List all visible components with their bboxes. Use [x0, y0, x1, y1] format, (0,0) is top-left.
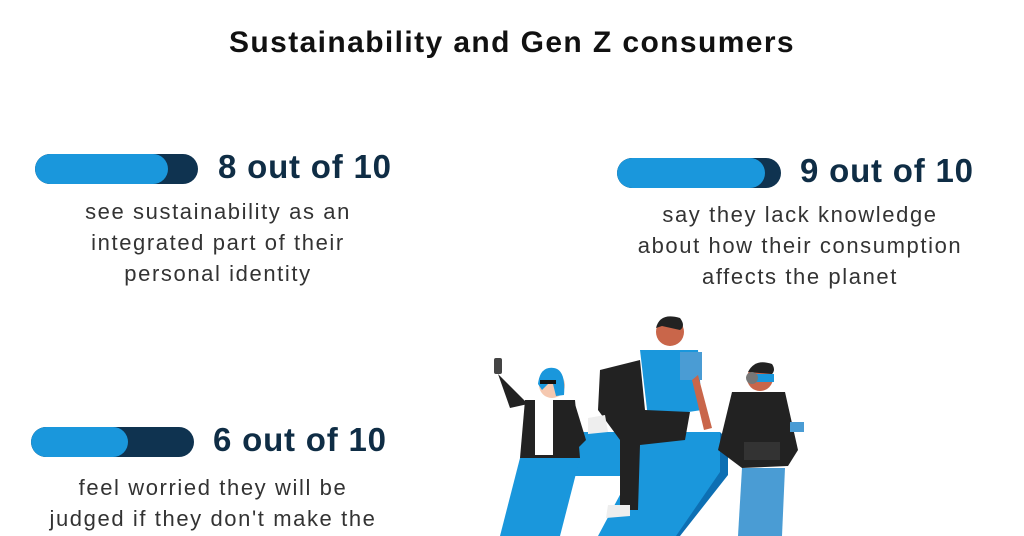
bar 1 [35, 154, 198, 184]
stat 3: 6 out of 10 [31, 421, 387, 531]
stat 2: 9 out of 10 [617, 152, 974, 289]
bar 2 [617, 158, 781, 188]
text 1: personal identity [124, 261, 312, 286]
big 7 [573, 432, 728, 536]
woman with phone [494, 358, 586, 536]
text 2 [638, 202, 962, 289]
text 3: judged if they don't make the [49, 506, 376, 531]
text 3 [48, 475, 376, 531]
text 1 [85, 199, 351, 286]
bar 3 [31, 427, 194, 457]
illustration: Gen Z people with number 7 [494, 316, 804, 536]
number 2: 9 out of 10 [800, 152, 974, 189]
text 2: affects the planet [702, 264, 898, 289]
text 2: say they lack knowledge [662, 202, 938, 227]
text 1: integrated part of their [91, 230, 345, 255]
number 1: 8 out of 10 [218, 148, 392, 185]
number 3: 6 out of 10 [213, 421, 387, 458]
title: Sustainability and Gen Z consumers [229, 26, 795, 59]
stat 1: 8 out of 10 [35, 148, 392, 286]
text 3: feel worried they will be [79, 475, 347, 500]
man with headset [718, 362, 804, 536]
text 1: see sustainability as an [85, 199, 351, 224]
man sitting [588, 316, 712, 518]
text 2: about how their consumption [638, 233, 962, 258]
